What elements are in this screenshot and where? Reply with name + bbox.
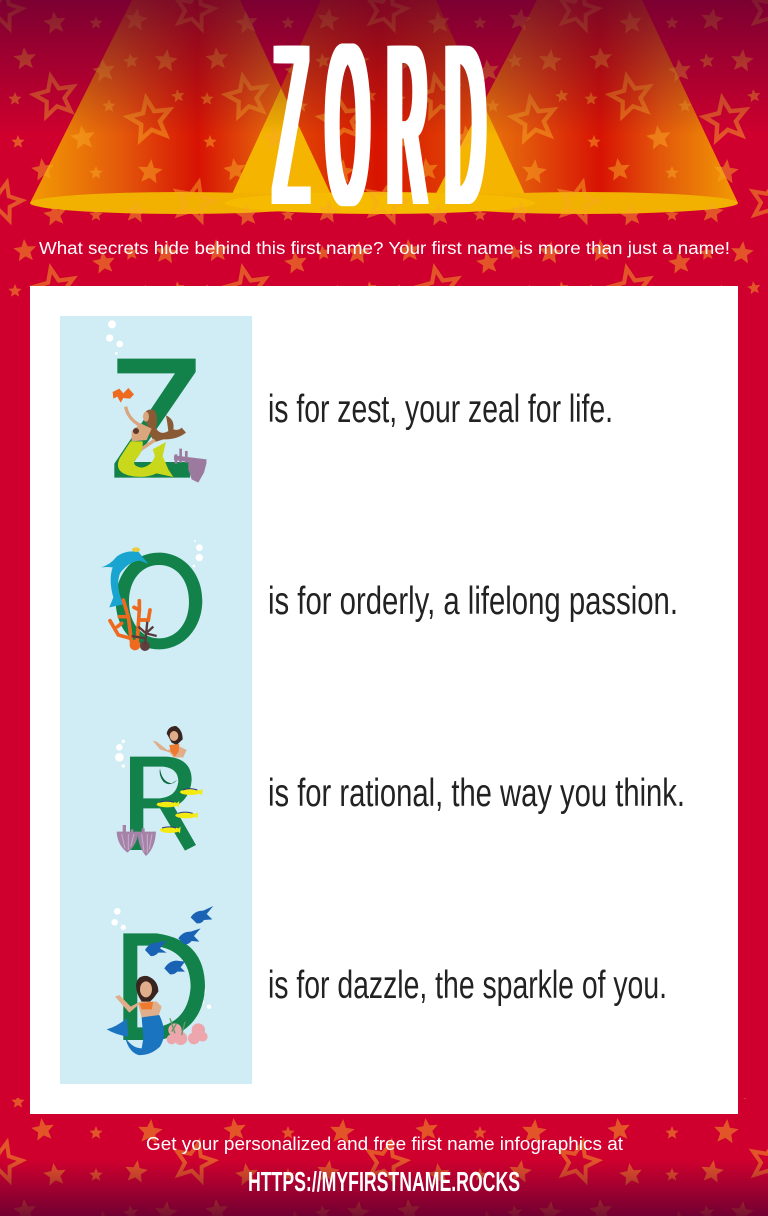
footer url: HTTPS://MYFIRSTNAME.ROCKS <box>248 1166 520 1197</box>
footer invitation: Get your personalized and free first name infographics at <box>146 1134 623 1154</box>
illustration: letter R with mermaid and fish <box>115 726 203 856</box>
star pattern: header <box>0 0 768 297</box>
title: ZORD <box>275 0 504 253</box>
illustration: letter Z with mermaid <box>106 320 207 483</box>
text: Z line: is for zest, your zeal for life. <box>268 388 613 431</box>
illustration: letter O with dolphin and coral <box>101 540 203 651</box>
light blue illustration strip <box>60 316 252 1084</box>
bottom shading <box>0 1160 768 1216</box>
white content panel <box>30 286 738 1114</box>
spotlights <box>30 0 738 214</box>
subtitle: What secrets hide behind this first name? Your first name is more than just a name! <box>39 238 730 258</box>
top shading <box>0 0 768 135</box>
star pattern: footer <box>0 1098 768 1216</box>
illustration: letter D with mermaid, fish and coral <box>107 906 213 1055</box>
